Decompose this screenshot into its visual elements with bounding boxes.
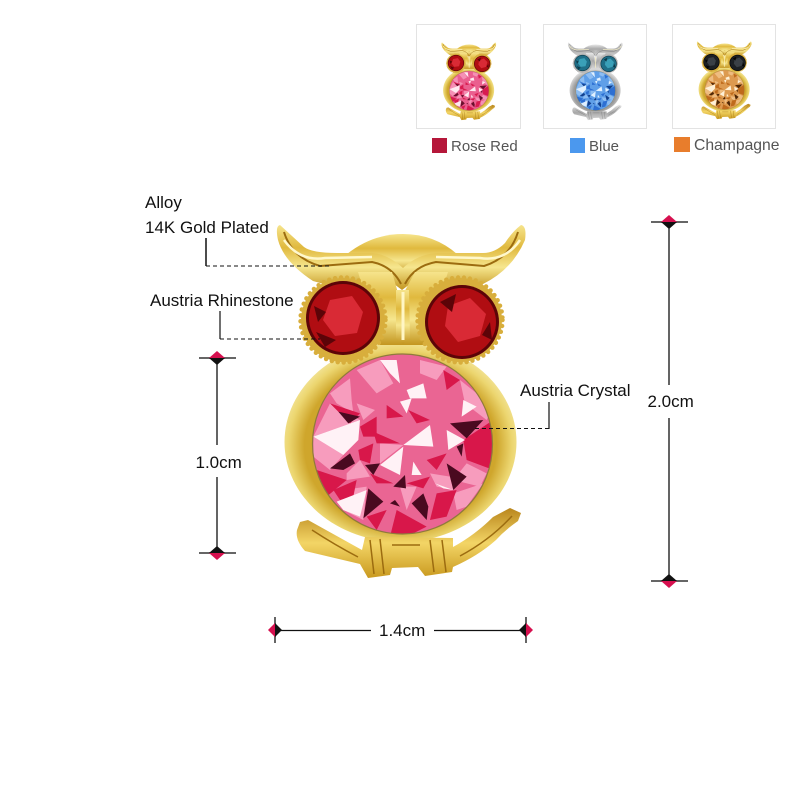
thumbnail: champagne owl <box>672 24 776 128</box>
dimension: width 1.4cm <box>268 617 533 643</box>
legend: blue <box>570 138 619 155</box>
callout: 14K gold plated: 14K Gold Plated <box>145 218 269 237</box>
dimension: body height 1.0cm <box>196 351 242 560</box>
dimension: height 2.0cm: 2.0cm <box>648 392 694 411</box>
label: alloy: Alloy <box>145 193 182 212</box>
callout: Austria Crystal: Austria Crystal <box>520 381 631 400</box>
thumbnail: blue owl <box>544 24 646 128</box>
dimension: body height 1.0cm: 1.0cm <box>196 453 242 472</box>
dimension: height 2.0cm <box>648 215 694 588</box>
legend: champagne: Champagne <box>694 137 780 154</box>
thumbnail: rose red owl <box>416 24 520 128</box>
legend: rose red: Rose Red <box>451 138 518 155</box>
main owl brooch illustration <box>277 225 526 578</box>
callout: Austria Rhinestone: Austria Rhinestone <box>150 291 294 310</box>
dimension: width 1.4cm: 1.4cm <box>379 621 425 640</box>
legend: blue: Blue <box>589 138 619 155</box>
